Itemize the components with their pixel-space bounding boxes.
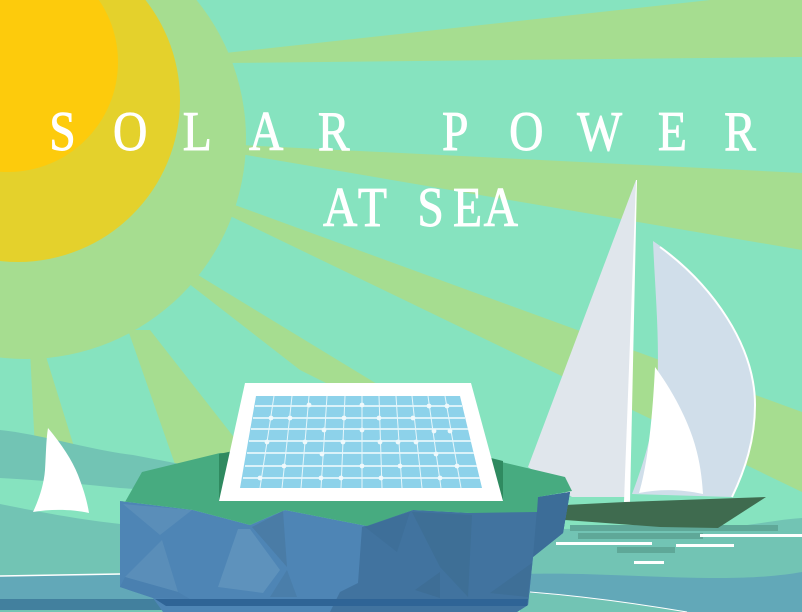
main sail: [528, 180, 636, 497]
rock body: [120, 492, 570, 612]
rock waterline: [155, 599, 528, 606]
panel grid: [243, 396, 480, 488]
title line: solar power: SOLAR POWER: [49, 102, 756, 163]
rock dark right side: [330, 492, 570, 612]
hull: [565, 497, 766, 528]
sun rays: [30, 0, 802, 492]
floating rock: [120, 492, 570, 612]
title line: at sea: AT SEA: [323, 178, 518, 239]
sea waves: [0, 430, 802, 612]
panel junction dots: [258, 403, 459, 480]
jib sail: [639, 367, 703, 494]
spinnaker white edge: [660, 247, 755, 497]
spinnaker sail: [632, 241, 755, 497]
small sailboat sail: [33, 428, 89, 513]
boat water streaks: [570, 525, 778, 553]
solar panel: [219, 383, 503, 501]
island top: [120, 453, 572, 526]
rock facets: [120, 492, 570, 599]
large sailboat: [528, 180, 802, 564]
panel frame: [219, 383, 503, 501]
panel supports: [219, 451, 503, 500]
mast: [624, 180, 637, 502]
panel cells: [240, 396, 482, 488]
sun: [0, 0, 246, 359]
title: [49, 102, 756, 239]
